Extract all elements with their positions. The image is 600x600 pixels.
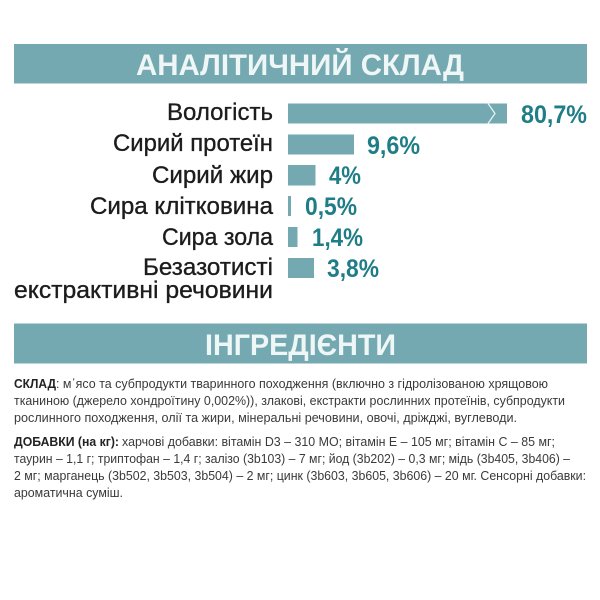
- row: crude fibre: 0,5%: [305, 193, 357, 221]
- row: crude protein: 9,6%: [367, 132, 420, 160]
- text block: composition: тканиною (джерело хондроїтину 0,002%)), злакові, екстракти рослинних протеїнів, субпродукти: [14, 394, 565, 408]
- row: crude fibre: [90, 193, 357, 221]
- row: nitrogen-free extract: Безазотисті: [143, 254, 273, 281]
- heading: ingredients: ІНГРЕДІЄНТИ: [205, 329, 396, 362]
- row: crude ash: Сира зола: [162, 224, 273, 251]
- panel: ingredients header: [14, 324, 587, 364]
- row: crude fat: [152, 162, 361, 190]
- text block: additives: [14, 435, 586, 500]
- text block: additives: ДОБАВКИ (на кг):: [14, 435, 119, 449]
- row: crude ash: 1,4%: [312, 224, 363, 252]
- text block: composition: [14, 377, 565, 425]
- text block: additives: таурин – 1,1 г; триптофан – 1,4 г; залізо (3b103) – 7 мг; йод (3b202) – 0,3 мг; мідь (3b405, 3b406) –: [14, 452, 570, 466]
- row: nitrogen-free extract: [14, 254, 379, 304]
- row: crude fibre: Сира клітковина: [90, 193, 273, 220]
- text block: additives: ароматична суміш.: [14, 486, 123, 500]
- row: crude fat: 4%: [329, 162, 361, 190]
- row: crude ash: [162, 224, 363, 252]
- panel: analytical composition header: [14, 44, 587, 84]
- text block: composition: СКЛАД: [14, 377, 56, 391]
- heading: analytical composition: АНАЛІТИЧНИЙ СКЛАД: [136, 48, 464, 82]
- text block: composition: : м᾿ясо та субпродукти тваринного походження (включно з гідролізованою хрящовою: [56, 377, 548, 391]
- row: moisture: Вологість: [167, 99, 273, 126]
- row: crude protein: [113, 130, 420, 160]
- text block: additives: харчові добавки: вітамін D3 – 310 МО; вітамін E – 105 мг; вітамін C – 85 мг;: [122, 435, 555, 449]
- row: crude fat: Сирий жир: [152, 162, 273, 189]
- row: crude protein: Сирий протеїн: [113, 130, 273, 157]
- chart: composition bars: [14, 99, 587, 304]
- row: moisture: 80,7%: [521, 101, 587, 129]
- row: nitrogen-free extract: 3,8%: [327, 255, 379, 283]
- row: nitrogen-free extract: екстрактивні речовини: [14, 277, 273, 304]
- row: moisture: [167, 99, 587, 129]
- text block: composition: рослинного походження, олії та жири, мінеральні речовини, овочі, дріжджі, вуглеводи.: [14, 411, 517, 425]
- text block: additives: 2 мг; марганець (3b502, 3b503, 3b504) – 2 мг; цинк (3b603, 3b605, 3b606) – 20 мг. Сенсорні добавки:: [14, 469, 586, 483]
